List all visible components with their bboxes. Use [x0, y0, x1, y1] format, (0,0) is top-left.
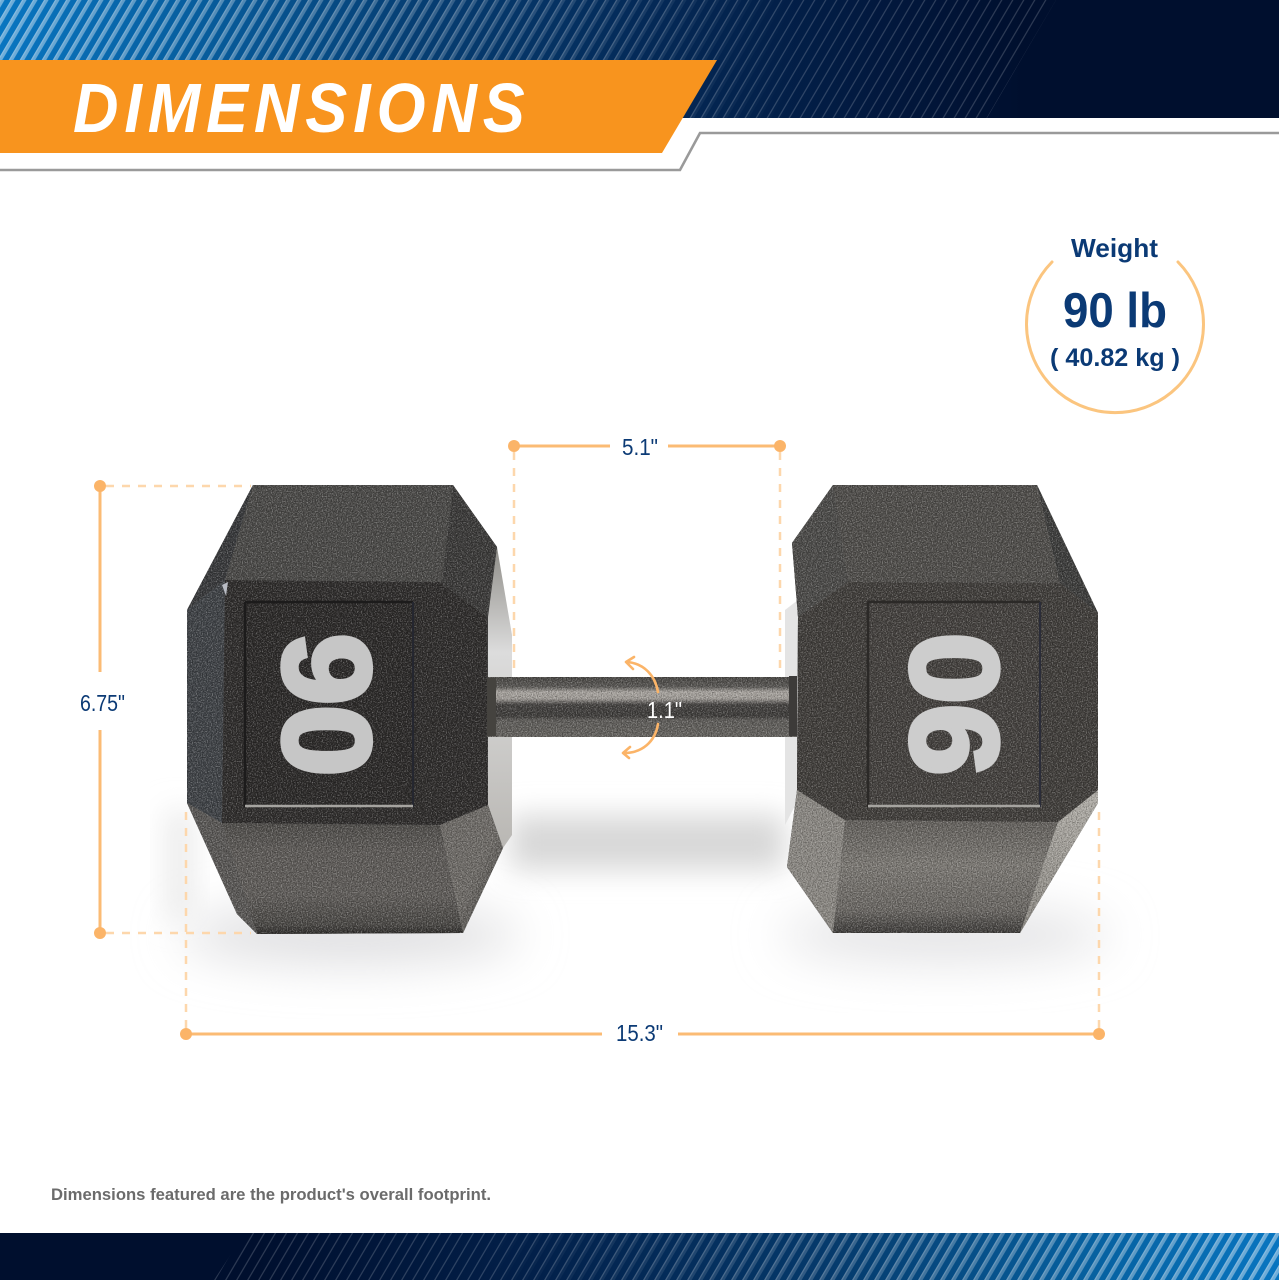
floor shadows — [165, 810, 1110, 963]
left head corner glint — [222, 582, 228, 596]
upper curved arrow — [626, 657, 658, 692]
header underline rule — [0, 133, 1279, 170]
lower curved arrow — [623, 724, 658, 758]
label 1.1 in: 1.1" — [647, 697, 682, 723]
footnote: Dimensions featured are the product's overall footprint. — [51, 1185, 491, 1204]
left head inset panel — [245, 602, 413, 807]
dimension: handle length 5.1 in — [508, 434, 786, 672]
label 6.75 in: 6.75" — [80, 690, 125, 716]
dimension: head height 6.75 in — [80, 480, 251, 939]
dumbbell handle — [487, 676, 797, 737]
light side of left head — [486, 547, 512, 848]
title banner — [0, 60, 717, 153]
label 15.3 in: 15.3" — [616, 1020, 663, 1046]
right weight head — [785, 485, 1098, 933]
badge weight in pounds: 90 lb — [1063, 284, 1167, 338]
dimension: overall length 15.3 in — [180, 812, 1105, 1046]
top header band — [0, 0, 1279, 118]
left weight head — [187, 485, 512, 934]
badge ring — [1026, 262, 1203, 413]
badge weight in kilograms: ( 40.82 kg ) — [1050, 344, 1180, 372]
title: DIMENSIONS — [73, 70, 525, 148]
dumbbell — [187, 485, 1098, 934]
light side of right head — [785, 600, 798, 825]
right head number: 90 — [886, 632, 1024, 776]
right head inset panel — [868, 602, 1040, 807]
label 5.1 in: 5.1" — [622, 434, 658, 460]
left head number: 90 — [257, 634, 395, 776]
dimension: handle diameter 1.1 in — [623, 657, 682, 758]
badge heading: Weight — [1071, 233, 1158, 263]
bottom footer band — [0, 1233, 1279, 1280]
weight badge — [1026, 233, 1203, 413]
